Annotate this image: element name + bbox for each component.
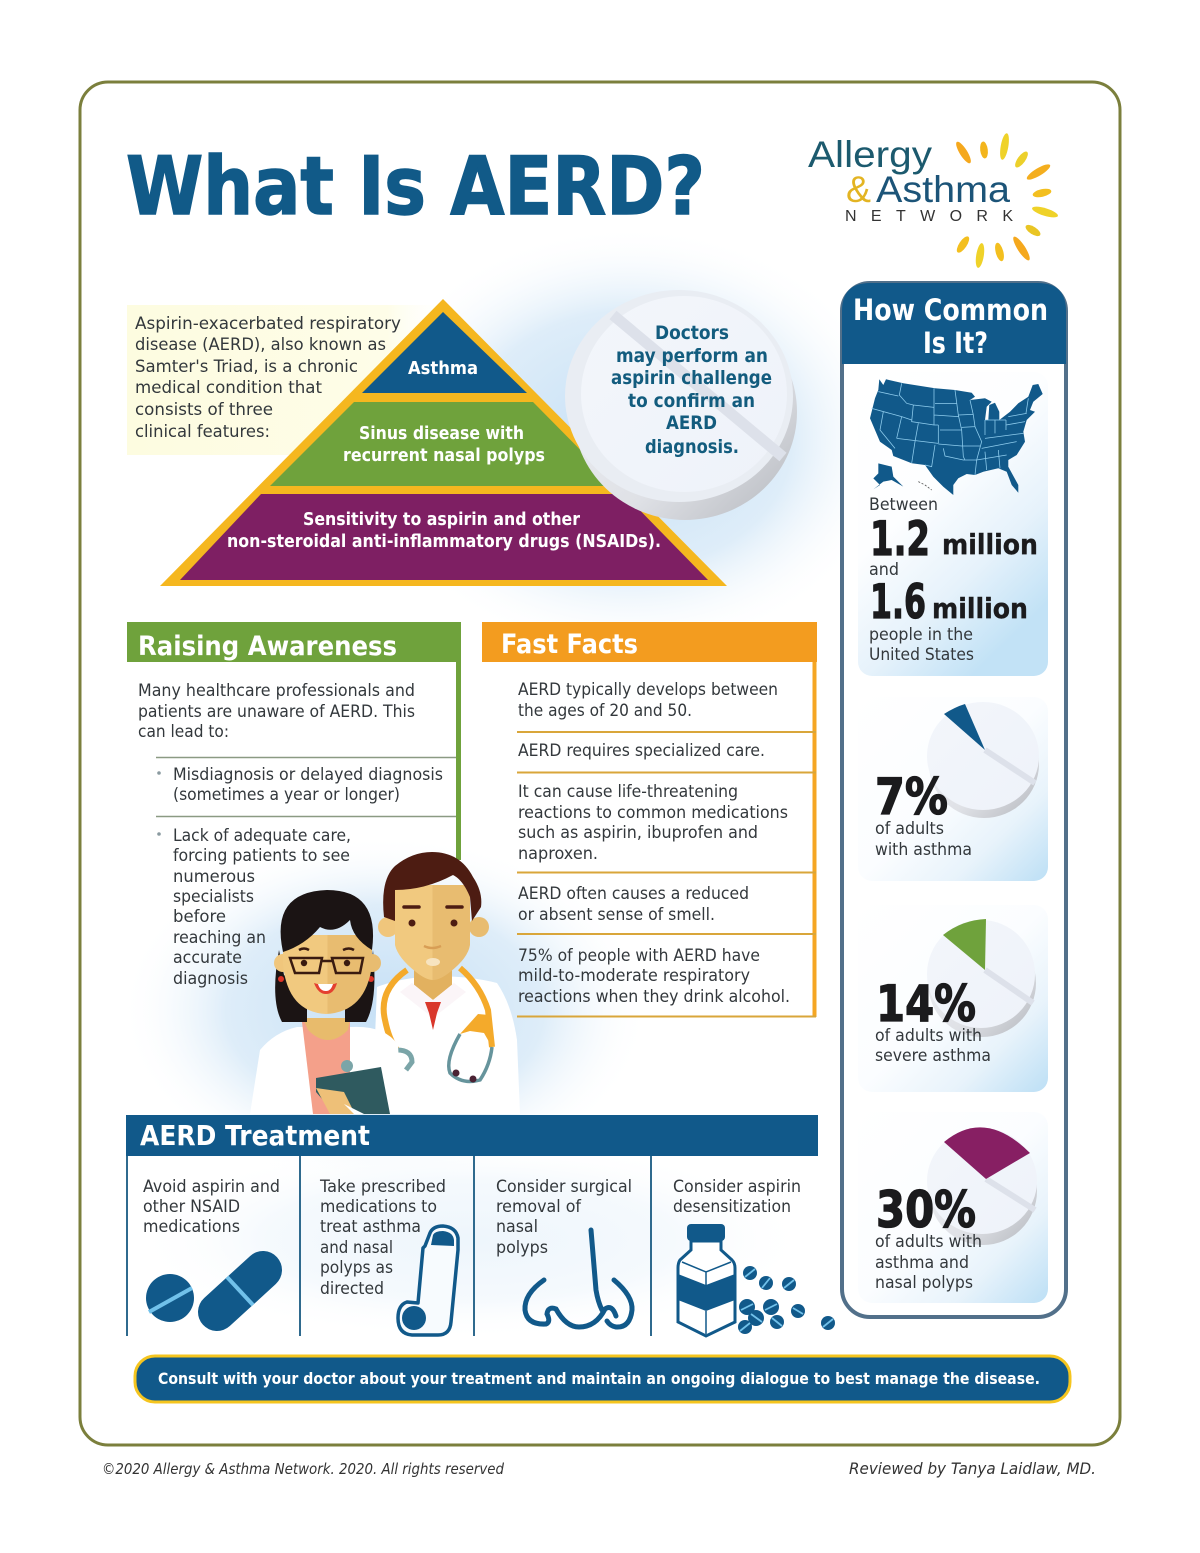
column: aspirin desensitization: desensitization	[673, 1197, 791, 1217]
male doctor	[372, 852, 520, 1114]
fact: reactions: naproxen.	[518, 844, 598, 864]
bullet: lack of adequate care: before	[173, 907, 226, 927]
icon: pills	[146, 1270, 263, 1322]
icon: inhaler	[398, 1226, 458, 1335]
heading: fast facts: Fast Facts	[501, 629, 638, 660]
heading: how common is it: Is It?	[923, 326, 988, 360]
fact: alcohol: mild-to-moderate respiratory	[518, 966, 750, 986]
background glow: pyramid	[360, 225, 900, 655]
fact: reactions: such as aspirin, ibuprofen and	[518, 823, 758, 843]
column: surgical removal: nasal	[496, 1217, 538, 1237]
footer: reviewer: Reviewed by Tanya Laidlaw, MD.	[849, 1459, 1096, 1478]
fact: sense of smell: AERD often causes a reduced	[518, 884, 749, 904]
heading: fast facts	[482, 622, 817, 662]
stat card: 30 percent: 30%	[876, 1181, 976, 1239]
icon: pill bottle	[678, 1224, 835, 1336]
text: unaware of AERD: can lead to:	[138, 722, 229, 742]
bullet: lack of adequate care: reaching an	[173, 928, 266, 948]
background glow: doctors	[120, 835, 650, 1185]
bullet: misdiagnosis	[157, 765, 443, 805]
background glow: treatment	[130, 1140, 810, 1340]
stat card: population: and	[869, 560, 899, 580]
bullet: lack of adequate care: numerous	[173, 867, 255, 887]
pyramid tier: sinus disease: recurrent nasal polyps	[343, 445, 545, 466]
panel: AERD treatment	[126, 1115, 835, 1336]
pyramid tier: aspirin sensitivity: Sensitivity to aspirin and other	[303, 509, 580, 530]
bullet: lack of adequate care: diagnosis	[173, 969, 248, 989]
aspirin pill callout: Doctors	[655, 322, 729, 344]
pie pill: 14 percent	[927, 919, 1036, 1037]
pyramid tier: asthma	[362, 312, 527, 393]
icon: nose	[525, 1230, 632, 1327]
bullet: misdiagnosis: (sometimes a year or longer)	[173, 785, 400, 805]
panel: raising awareness	[127, 622, 461, 989]
stat card: population: million	[932, 592, 1028, 625]
illustration: doctors	[250, 852, 520, 1114]
pyramid tier: aspirin sensitivity	[180, 494, 708, 580]
text: unaware of AERD: Many healthcare professionals and	[138, 681, 415, 701]
stat card: population: United States	[869, 645, 974, 665]
stat card: 30 percent	[858, 1112, 1048, 1303]
stat card: 30 percent: of adults with	[875, 1232, 982, 1252]
bullet: lack of adequate care	[157, 826, 351, 989]
fact: onset age: AERD typically develops between	[518, 680, 778, 700]
column: aspirin desensitization	[673, 1177, 835, 1336]
stat card: 7 percent: with asthma	[875, 840, 972, 860]
intro text block	[127, 305, 452, 455]
column: prescribed medications: directed	[320, 1279, 384, 1299]
stat card: population: 1.2	[870, 512, 930, 567]
stat card: 14 percent: of adults with	[875, 1026, 982, 1046]
column: prescribed medications: polyps as	[320, 1258, 393, 1278]
pie pill: 30 percent	[927, 1127, 1037, 1245]
stat card: 14 percent: severe asthma	[875, 1046, 991, 1066]
fact: reactions: It can cause life-threatening	[518, 782, 738, 802]
title: What Is AERD?	[126, 140, 705, 233]
heading: AERD treatment: AERD Treatment	[140, 1119, 370, 1152]
callout: consult with your doctor: Consult with your doctor about your treatment and maintain an ongoing dialogue to best manage the disease.	[158, 1369, 1040, 1388]
column: surgical removal: removal of	[496, 1197, 582, 1217]
fact: sense of smell	[518, 884, 749, 925]
female doctor	[250, 890, 402, 1114]
column: prescribed medications: treat asthma	[320, 1217, 421, 1237]
fact: reactions: reactions to common medications	[518, 803, 788, 823]
intro text block: Samter's Triad, is a chronic	[135, 357, 358, 377]
stat card: 14 percent: 14%	[876, 975, 976, 1033]
bullet: lack of adequate care: accurate	[173, 948, 242, 968]
column: surgical removal: polyps	[496, 1238, 548, 1258]
stat card: 30 percent: asthma and	[875, 1253, 969, 1273]
text: unaware of AERD	[138, 681, 415, 742]
aspirin pill callout	[565, 290, 797, 520]
stat card: 30 percent: nasal polyps	[875, 1273, 973, 1293]
panel: how common is it	[842, 283, 1066, 1317]
column: avoid aspirin: Avoid aspirin and	[143, 1177, 280, 1197]
fact: alcohol: reactions when they drink alcohol.	[518, 987, 790, 1007]
intro text block: consists of three	[135, 400, 273, 420]
stat card: population	[858, 372, 1048, 676]
footer: copyright: ©2020 Allergy & Asthma Network. 2020. All rights reserved	[102, 1460, 504, 1478]
logo: Allergy & Asthma Network: Allergy	[808, 134, 933, 175]
text: unaware of AERD: patients are unaware of AERD. This	[138, 702, 415, 722]
stat card: 7 percent	[858, 697, 1048, 881]
aspirin pill callout: to confirm an	[628, 390, 755, 412]
fact: onset age	[518, 680, 778, 721]
aspirin pill callout: may perform an	[616, 345, 768, 367]
intro text block: medical condition that	[135, 378, 322, 398]
column: prescribed medications: and nasal	[320, 1238, 393, 1258]
fact: sense of smell: or absent sense of smell.	[518, 905, 715, 925]
logo: Allergy & Asthma Network	[808, 133, 1059, 268]
stat card: 7 percent: of adults	[875, 819, 944, 839]
column: avoid aspirin	[143, 1177, 280, 1322]
pyramid tier: asthma: Asthma	[408, 358, 478, 379]
heading: how common is it: How Common	[853, 293, 1048, 327]
bullet: misdiagnosis: Misdiagnosis or delayed diagnosis	[173, 765, 443, 785]
stat card: population: million	[942, 528, 1038, 561]
column: avoid aspirin: other NSAID	[143, 1197, 240, 1217]
aspirin pill callout: AERD	[666, 412, 717, 434]
column: surgical removal	[496, 1177, 632, 1327]
column: surgical removal: Consider surgical	[496, 1177, 632, 1197]
logo: Allergy & Asthma Network: NETWORK	[845, 208, 1013, 225]
stat card: population: people in the	[869, 625, 973, 645]
page frame	[80, 82, 1120, 1445]
logo: Allergy & Asthma Network: &	[846, 169, 871, 210]
bullet: lack of adequate care: specialists	[173, 887, 254, 907]
pyramid tier: aspirin sensitivity: non-steroidal anti-inflammatory drugs (NSAIDs).	[227, 531, 661, 552]
aspirin pill callout: diagnosis.	[645, 436, 739, 458]
clipboard	[316, 1060, 390, 1114]
logo: Allergy & Asthma Network: Asthma	[876, 169, 1010, 210]
intro text block: clinical features:	[135, 422, 270, 442]
aspirin pill callout: aspirin challenge	[611, 367, 772, 389]
column: prescribed medications	[319, 1177, 458, 1335]
stat card: population: 1.6	[870, 575, 926, 630]
stat card: population: Between	[869, 495, 938, 515]
pyramid diagram	[160, 299, 727, 586]
bullet: lack of adequate care: forcing patients to see	[173, 846, 350, 866]
column: prescribed medications: Take prescribed	[319, 1177, 446, 1197]
column: aspirin desensitization: Consider aspirin	[673, 1177, 801, 1197]
pyramid tier: sinus disease: Sinus disease with	[359, 423, 524, 444]
fact: alcohol	[518, 946, 790, 1007]
fact: alcohol: 75% of people with AERD have	[518, 946, 760, 966]
stat card: 7 percent: 7%	[875, 768, 948, 826]
pyramid tier: sinus disease	[270, 402, 616, 486]
heading: how common is it	[842, 283, 1066, 364]
fact: reactions	[518, 782, 788, 864]
pie pill: 7 percent	[927, 702, 1039, 818]
icon: US map	[870, 379, 1043, 495]
stat card: 14 percent	[858, 905, 1048, 1092]
column: avoid aspirin: medications	[143, 1217, 240, 1237]
fact: specialized care: AERD requires specialized care.	[518, 741, 765, 761]
intro text block: disease (AERD), also known as	[135, 335, 386, 355]
column: prescribed medications: medications to	[320, 1197, 437, 1217]
fact: onset age: the ages of 20 and 50.	[518, 701, 692, 721]
heading: AERD treatment	[126, 1115, 818, 1156]
heading: raising awareness	[127, 622, 461, 662]
bullet: lack of adequate care: Lack of adequate care,	[173, 826, 351, 846]
intro text block: Aspirin-exacerbated respiratory	[135, 314, 401, 334]
panel: fast facts	[482, 622, 817, 1017]
callout: consult with your doctor	[135, 1356, 1070, 1402]
heading: raising awareness: Raising Awareness	[138, 631, 397, 662]
